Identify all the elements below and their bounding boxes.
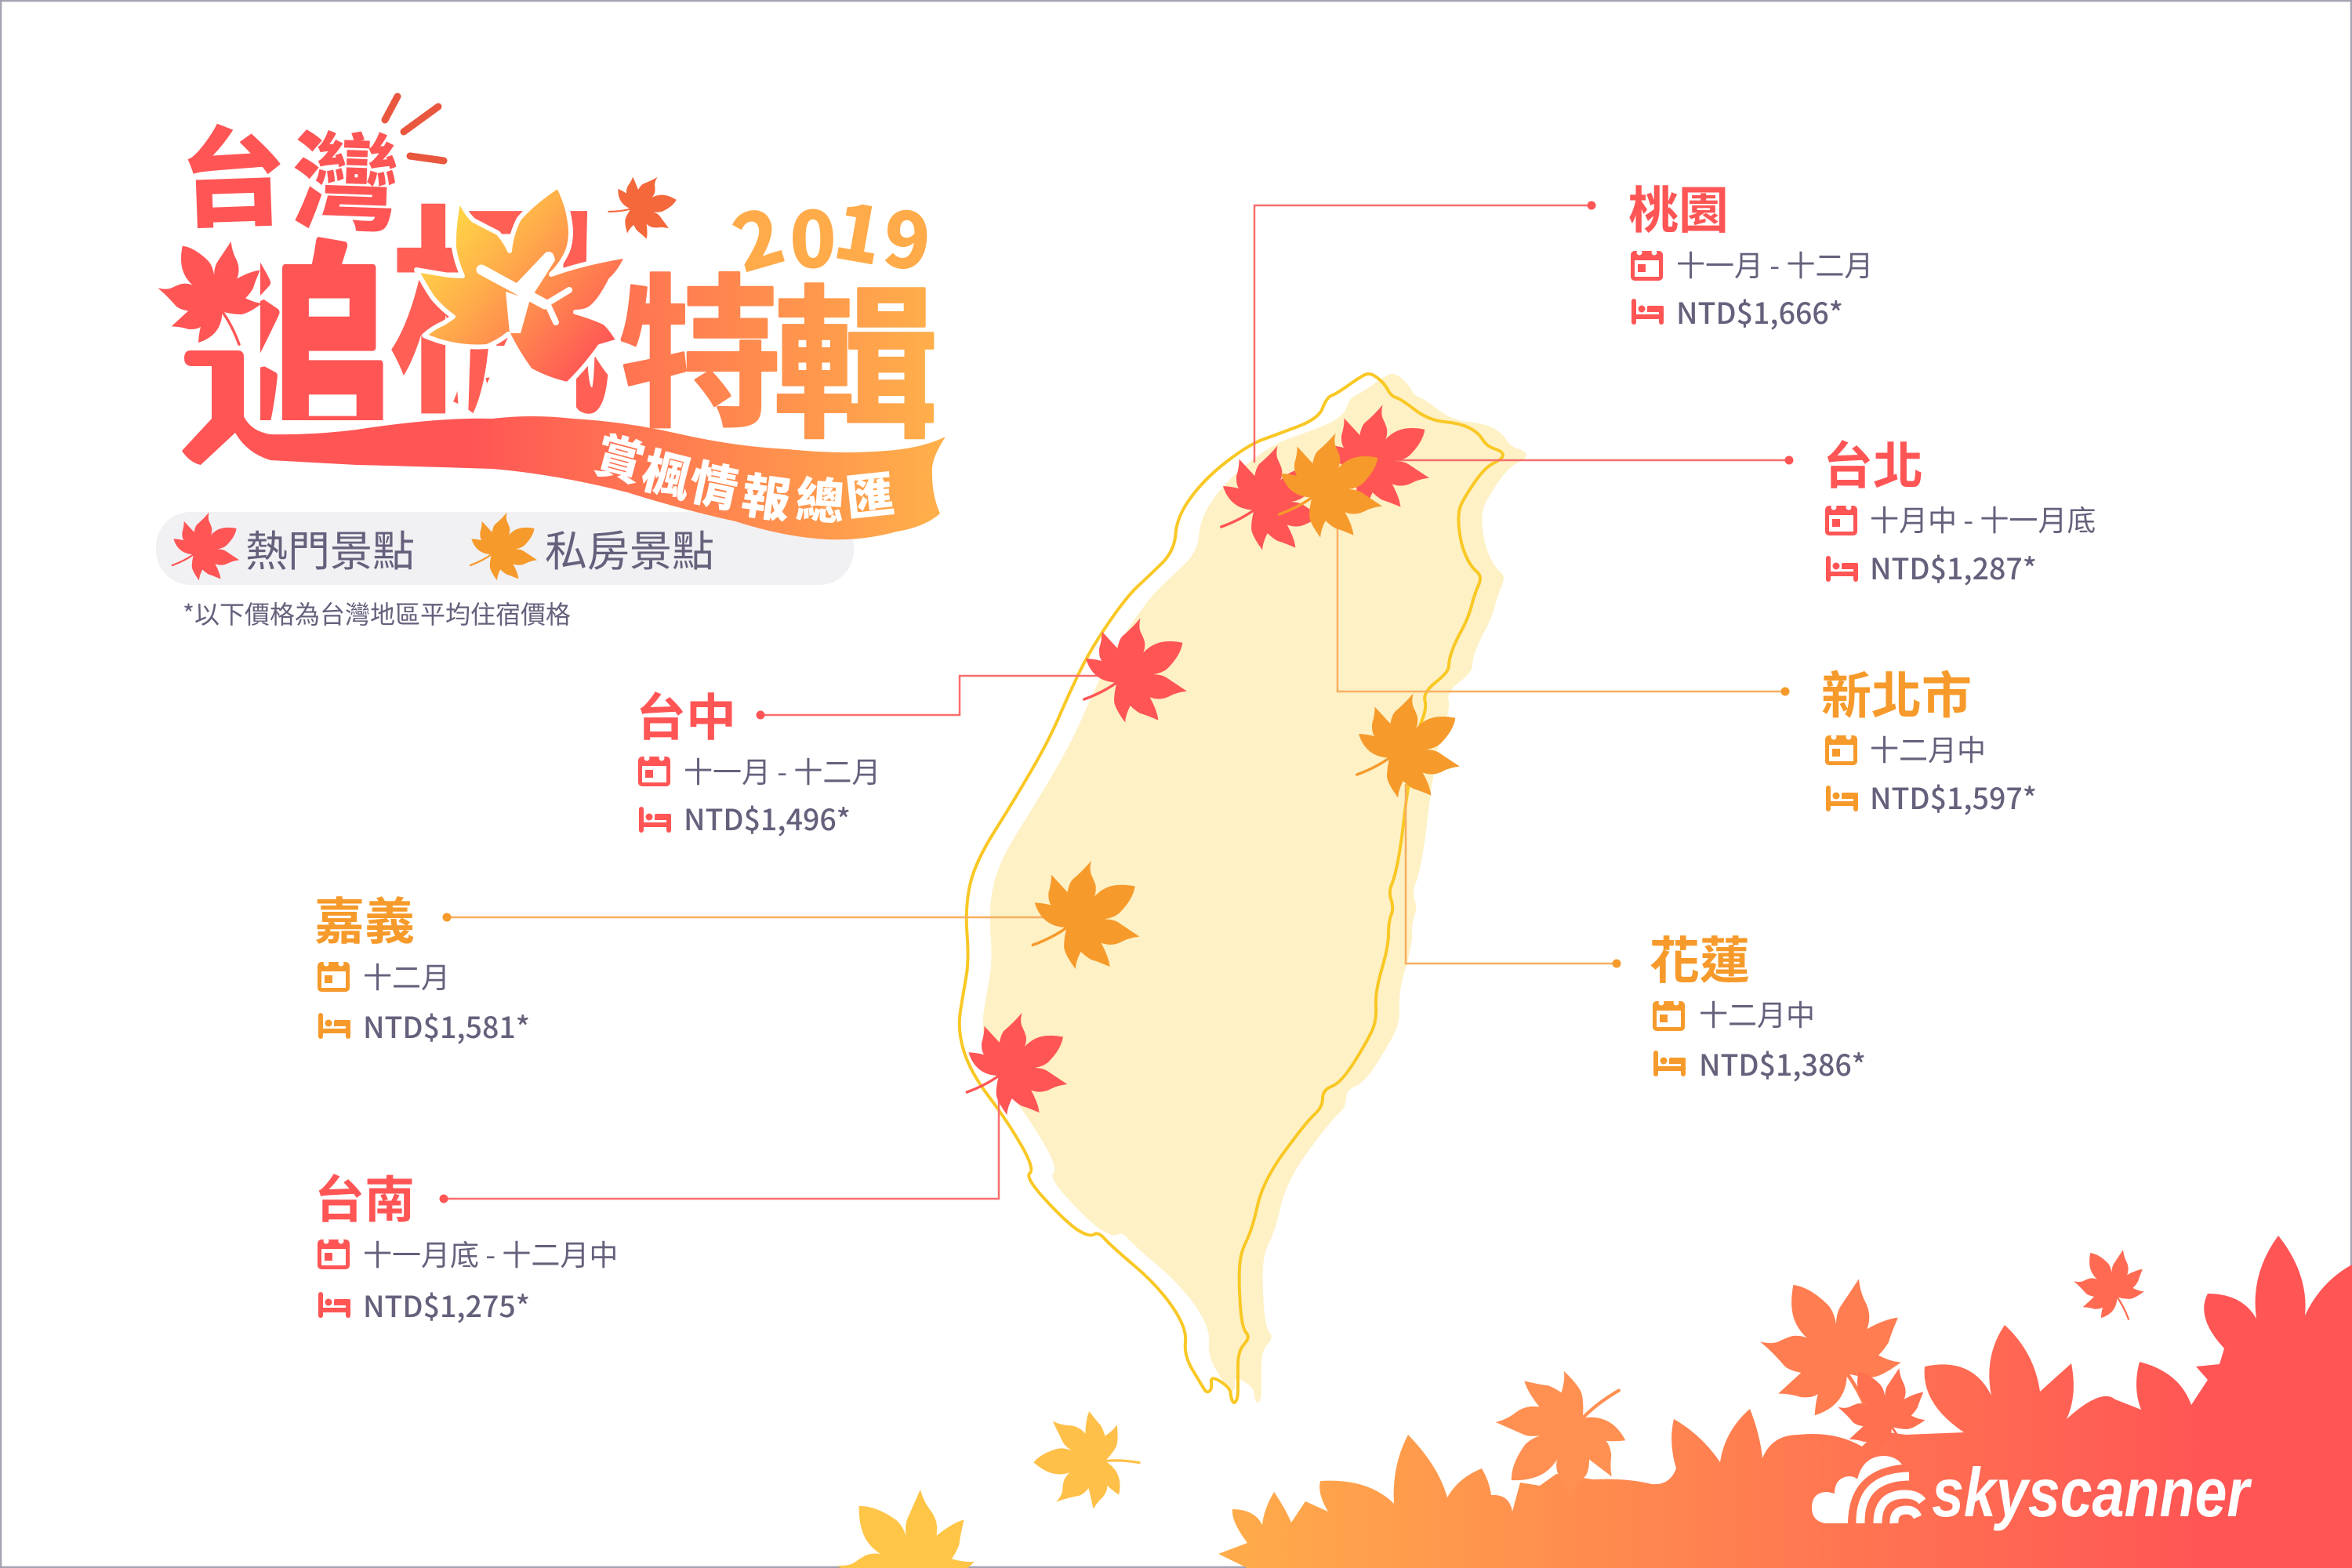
location: New Taipei: 新北市 [1821, 656, 1972, 728]
楓: 楓 [387, 135, 611, 459]
location: New Taipei: 十二月中 [1870, 727, 1986, 769]
logo cloud [1812, 1456, 1902, 1523]
leader line: Taoyuan [1254, 201, 1596, 463]
location: Taichung: 十一月 - 十二月 [684, 749, 880, 791]
location: Taoyuan [1628, 171, 1873, 332]
footnote: *以下價格為台灣地區平均住宿價格 [183, 595, 571, 631]
leader line: Chiayi [442, 913, 1051, 922]
leader line: Taichung [756, 676, 1098, 720]
location: Taichung: NTD$1,496* [684, 796, 851, 839]
ribbon text [588, 416, 898, 534]
title logo [158, 92, 946, 552]
title: Taiwan: 台 [177, 92, 289, 250]
map of Taiwan [960, 374, 1526, 1403]
legend leaf: hidden gems [470, 513, 537, 580]
location: Tainan: 十一月底 - 十二月中 [363, 1232, 618, 1274]
marker leaf: Chiayi [1033, 861, 1139, 969]
location: Taoyuan: 十一月 - 十二月 [1676, 242, 1873, 285]
legend panel [156, 512, 854, 585]
特: 特 [618, 222, 782, 460]
plane [481, 252, 569, 333]
foliage leaf top right [2074, 1250, 2144, 1319]
location: Tainan: 台南 [314, 1160, 415, 1232]
legend label: popular: 熱門景點 [245, 517, 415, 579]
location: Taipei [1823, 426, 2096, 588]
sparks [385, 96, 444, 161]
location: Taichung [636, 678, 880, 839]
big gradient leaf with plane [416, 186, 627, 384]
location: Hualien [1650, 921, 1866, 1084]
location: Hualien: 十二月中 [1699, 992, 1815, 1034]
marker leaf: Hualien [1357, 693, 1460, 798]
leader line: Taipei [1397, 456, 1794, 464]
map outline [960, 374, 1503, 1403]
title: Taiwan [177, 92, 401, 254]
location: Hualien: 花蓮 [1650, 921, 1750, 993]
location: Taoyuan: 桃園 [1628, 171, 1729, 243]
ribbon text: 報 [738, 456, 796, 532]
marker leaf: Taoyuan [1221, 445, 1324, 550]
logo wordmark: skyscanner [1932, 1454, 2252, 1531]
location: Chiayi: NTD$1,581* [363, 1004, 530, 1047]
location: Taichung: 台中 [636, 678, 736, 750]
location: Taipei: 台北 [1823, 426, 1923, 499]
title: 2019 [719, 170, 936, 295]
location: Tainan: NTD$1,275* [363, 1283, 530, 1326]
location: Chiayi: 十二月 [363, 954, 450, 996]
foliage leaf small [1838, 1368, 1926, 1454]
title: 2019: 1 [827, 170, 892, 288]
追 left stroke [184, 350, 244, 423]
title: chasing maple special [158, 183, 942, 539]
skyscanner logo [1812, 1454, 2252, 1531]
location: Taoyuan: NTD$1,666* [1676, 289, 1843, 332]
追 right part: 追 [215, 157, 398, 552]
title: 2019: 0 [789, 179, 837, 290]
marker leaf: Taichung [1084, 618, 1187, 723]
decorative falling leaf: yellow bottom [826, 1483, 984, 1568]
leader line: Hualien [1406, 784, 1621, 967]
ribbon text: 楓 [636, 431, 700, 511]
red leaf left [158, 241, 263, 344]
location: New Taipei: NTD$1,597* [1870, 775, 2037, 818]
title: 2019: 2 [719, 175, 795, 295]
楓 openings [454, 337, 576, 420]
location: Chiayi: 嘉義 [314, 882, 415, 954]
decorative falling leaf: yellow [1018, 1396, 1150, 1528]
logo arcs [1860, 1476, 1922, 1523]
location: Chiayi [314, 882, 530, 1047]
ribbon text: 情 [684, 443, 746, 522]
title: Taiwan: 灣 [290, 96, 401, 254]
location: Taipei: 十月中 - 十一月底 [1870, 497, 2096, 539]
map fill [983, 374, 1526, 1403]
marker leaf: New Taipei [1279, 433, 1382, 538]
foliage silhouette [1218, 1236, 2352, 1568]
location: Taipei: NTD$1,287* [1870, 545, 2037, 588]
ribbon text: 賞 [588, 416, 653, 496]
ribbon text: 總 [793, 460, 848, 534]
marker leaf: Tainan [967, 1013, 1067, 1115]
leader line: Tainan [439, 1098, 999, 1203]
title: 2019: 9 [878, 177, 936, 293]
legend leaf: popular [172, 513, 239, 580]
location: Tainan [314, 1160, 618, 1326]
ribbon text: 匯 [842, 455, 898, 530]
ribbon [182, 412, 946, 539]
leader line: New Taipei [1338, 502, 1789, 696]
foliage [1218, 1236, 2352, 1568]
輯: 輯 [773, 233, 938, 471]
location: New Taipei [1821, 656, 2037, 818]
legend label: hidden gems: 私房景點 [545, 517, 714, 579]
marker leaf: Taipei [1327, 405, 1429, 510]
foliage leaf large [1760, 1279, 1901, 1417]
foliage leaf middle [1489, 1363, 1636, 1511]
small leaf top [604, 165, 684, 246]
location: Hualien: NTD$1,386* [1699, 1041, 1866, 1084]
